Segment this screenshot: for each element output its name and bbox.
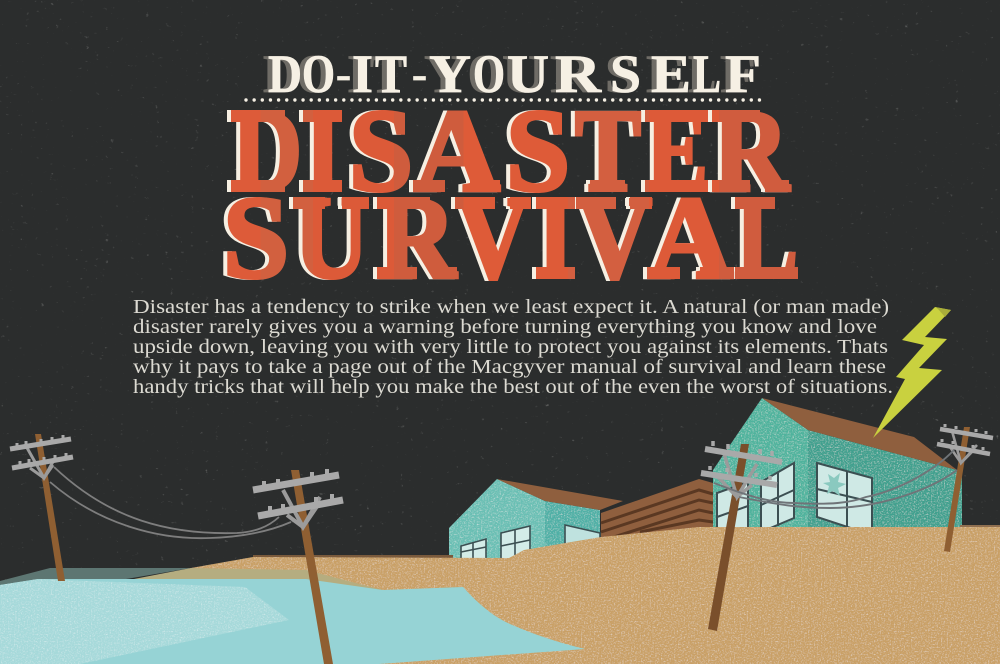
title: do-it-yourself: I (352, 44, 373, 104)
title: do-it-yourself: E (651, 44, 691, 104)
flood fringe (134, 568, 470, 596)
flood shadow (0, 568, 191, 588)
title: disaster: I (304, 85, 342, 216)
title: survival: V (573, 172, 648, 303)
title: do-it-yourself: E (646, 44, 686, 104)
title: do-it-yourself: S (610, 44, 641, 104)
intro text block: why it pays to take a page out of the Macgyver manual of survival and learn these (133, 356, 886, 378)
water (0, 568, 585, 664)
utility pole 3 (701, 441, 782, 631)
title: disaster: T (575, 85, 641, 216)
small house (449, 479, 623, 560)
title: disaster: T (571, 85, 637, 216)
title: survival: I (533, 172, 570, 303)
title: do-it-yourself: U (507, 44, 549, 104)
title: survival: I (537, 172, 574, 303)
title: survival (219, 172, 798, 303)
title: do-it-yourself: T (370, 44, 402, 104)
big house (713, 398, 962, 535)
title: do-it-yourself: T (375, 44, 407, 104)
intro text block: Disaster has a tendency to strike when we least expect it. A natural (or man made) (133, 296, 889, 318)
title: do-it-yourself: D (263, 44, 297, 104)
title: do-it-yourself: R (550, 44, 597, 104)
title: do-it-yourself: - (412, 52, 427, 97)
title: disaster: S (345, 85, 409, 216)
title: disaster: S (506, 85, 570, 216)
title: do-it-yourself: O (302, 44, 335, 104)
title: disaster: E (646, 85, 708, 216)
title: disaster: S (502, 85, 566, 216)
title: survival: A (644, 172, 729, 303)
wires: left span (50, 467, 291, 538)
title: disaster: R (713, 85, 791, 216)
roof (762, 398, 957, 470)
title: do-it-yourself: I (347, 44, 368, 104)
title: survival: V (452, 172, 526, 303)
title: do-it-yourself: Y (429, 44, 471, 104)
utility pole 2 (253, 469, 343, 664)
title: do-it-yourself: - (336, 52, 351, 97)
title: do-it-yourself: D (268, 44, 302, 104)
title: do-it-yourself: O (297, 44, 330, 104)
title: disaster: D (228, 85, 298, 216)
title: survival: S (223, 172, 289, 303)
title: do-it-yourself: L (693, 44, 721, 104)
title: disaster: D (232, 85, 302, 216)
title: do-it-yourself: R (555, 44, 602, 104)
utility pole 4 (937, 424, 993, 552)
title: disaster: A (410, 85, 496, 216)
title: survival: R (374, 172, 454, 303)
title: disaster: I (300, 85, 338, 216)
title: survival: U (290, 172, 365, 303)
icon: lightning bolt (873, 307, 951, 438)
title: survival: V (456, 172, 530, 303)
striped building (601, 479, 713, 541)
title: do-it-yourself: O (468, 44, 500, 104)
sand ground (0, 525, 1000, 664)
title: survival: L (732, 172, 794, 303)
icon: cracked window (823, 473, 846, 496)
utility pole 1 (10, 434, 73, 581)
title: do-it-yourself: O (473, 44, 505, 104)
title: disaster: A (414, 85, 500, 216)
title: survival: A (648, 172, 733, 303)
title: do-it-yourself: F (725, 44, 761, 104)
title: do-it-yourself: L (688, 44, 716, 104)
title: survival: U (294, 172, 369, 303)
intro text block: upside down, leaving you with very little to protect you against its elements. Thats (133, 336, 888, 358)
title: do-it-yourself: S (605, 44, 636, 104)
title: disaster: E (642, 85, 704, 216)
title: survival: L (736, 172, 798, 303)
title: do-it-yourself (263, 44, 761, 104)
title: disaster: S (349, 85, 413, 216)
title: disaster: R (709, 85, 787, 216)
flood light patch (0, 579, 289, 664)
big house windows (717, 463, 872, 535)
title: survival: R (378, 172, 458, 303)
dotted divider (246, 98, 765, 102)
title: survival: S (219, 172, 285, 303)
intro text block (133, 296, 893, 398)
intro text block: disaster rarely gives you a warning before turning everything you know and love (133, 316, 877, 338)
intro text block: handy tricks that will help you make the best out of the even the worst of situations. (133, 376, 893, 398)
title: do-it-yourself: U (502, 44, 544, 104)
title: do-it-yourself: F (720, 44, 756, 104)
title: do-it-yourself: Y (424, 44, 466, 104)
flood water (0, 579, 585, 664)
small house windows (461, 525, 600, 560)
title: disaster (227, 85, 791, 216)
title: survival: V (577, 172, 652, 303)
wires: right span (714, 450, 957, 508)
